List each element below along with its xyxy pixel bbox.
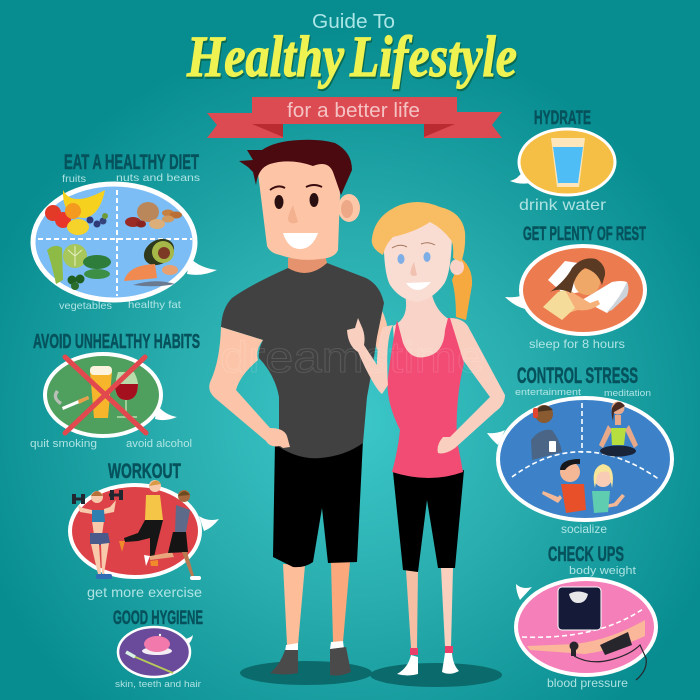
speech bubble: [487, 398, 672, 520]
ribbon banner: for a better life: [287, 100, 420, 122]
labels: quit smoking: [30, 438, 97, 450]
icon: woman lifting dumbbells: [72, 490, 123, 579]
man socks and shoes: [270, 641, 351, 676]
man figure: [209, 140, 388, 676]
speech bubble: [516, 579, 656, 675]
speech bubble: [510, 129, 615, 195]
icon: healthy fat: [124, 234, 179, 286]
woman ponytail: [452, 258, 472, 320]
woman neck and chest: [393, 295, 462, 360]
woman dress: [388, 318, 464, 478]
man head: [257, 154, 340, 260]
heading: WORKOUT: [108, 460, 181, 483]
man hair: [239, 140, 352, 195]
speech bubble: [33, 184, 217, 300]
woman socks and shoes: [397, 646, 459, 676]
icon: fruits: [45, 190, 108, 235]
ribbon banner: [207, 97, 502, 138]
icon: socializing couple: [542, 459, 625, 513]
watermark: dreamstime: [220, 333, 485, 382]
label: get more exercise: [87, 584, 202, 600]
title: healthy lifestyle: [186, 24, 518, 91]
labels: entertainment: [515, 387, 581, 398]
panel: control stress: [487, 363, 672, 536]
title: guide to: Guide To: [312, 11, 395, 33]
icon: soap: [142, 634, 172, 655]
labels: body weight: [569, 565, 636, 577]
ground shadow: [240, 661, 502, 687]
labels: meditation: [604, 388, 651, 399]
icon: runner in grey: [144, 490, 201, 580]
title: healthy lifestyle: Healthy: [186, 24, 344, 89]
woman left arm: [438, 318, 505, 453]
woman hair: [372, 202, 465, 262]
panel: eat a healthy diet: [33, 151, 217, 312]
labels: blood pressure: [547, 676, 628, 690]
woman right arm: [347, 318, 393, 394]
labels: [30, 438, 192, 450]
icon: runner in yellow: [119, 480, 163, 566]
icon: sleeping woman: [543, 258, 628, 320]
heading: CHECK UPS: [548, 543, 624, 566]
labels: fruits: [62, 173, 86, 185]
man front arm: [209, 327, 290, 448]
heading: GOOD HYGIENE: [113, 608, 203, 629]
speech bubble: [118, 627, 193, 677]
icon: wine: [115, 372, 138, 417]
panel: check ups: [516, 543, 656, 690]
woman leggings: [393, 470, 464, 572]
icon: blood pressure cuff: [527, 620, 646, 680]
heading: AVOID UNHEALTHY HABITS: [33, 331, 200, 353]
panel: hydrate: [510, 108, 615, 214]
man ear: [338, 194, 360, 222]
speech bubble: [45, 354, 177, 436]
heading: EAT A HEALTHY DIET: [64, 151, 199, 174]
heading: HYDRATE: [534, 108, 591, 129]
icon: glass of water: [551, 138, 585, 187]
panel: workout: [70, 460, 219, 600]
panel: avoid unhealthy habits: [30, 331, 200, 450]
label: drink water: [519, 197, 607, 214]
icon: man with headphones: [531, 405, 562, 460]
woman ear: [450, 259, 464, 275]
icon: vegetables: [47, 244, 111, 290]
labels: [515, 387, 651, 536]
icon: cigarette: [54, 390, 89, 410]
title: healthy lifestyle: Lifestyle: [350, 26, 518, 91]
woman head: [384, 215, 452, 302]
labels: [547, 565, 636, 690]
title block: [186, 11, 518, 138]
icon: meditating woman: [599, 402, 638, 456]
icon: nuts and beans: [125, 202, 182, 229]
speech bubble: [70, 485, 219, 577]
icon: red cross: [65, 357, 146, 433]
labels: avoid alcohol: [126, 438, 192, 450]
icon: beer: [90, 366, 112, 418]
labels: socialize: [561, 522, 607, 536]
icon: toothbrush: [126, 652, 173, 673]
man face: [270, 185, 322, 249]
speech bubble: [505, 246, 645, 334]
title: healthy lifestyle: Healthy: [187, 26, 345, 91]
title: healthy lifestyle: Lifestyle: [349, 24, 517, 89]
labels: [59, 172, 200, 312]
icon: bathroom scale: [558, 587, 601, 630]
woman legs: [406, 568, 453, 648]
panel: rest: [505, 224, 646, 351]
man neck: [288, 255, 327, 273]
man shorts: [273, 440, 363, 567]
labels: healthy fat: [128, 299, 181, 311]
label: sleep for 8 hours: [529, 337, 625, 351]
labels: nuts and beans: [116, 172, 200, 184]
man legs: [283, 562, 350, 645]
man back arm: [372, 300, 388, 350]
woman face: [392, 243, 435, 290]
label: skin, teeth and hair: [115, 679, 201, 690]
labels: vegetables: [59, 300, 112, 312]
panel: good hygiene: [113, 608, 203, 690]
man shirt: [221, 263, 384, 458]
woman figure: [347, 202, 505, 676]
